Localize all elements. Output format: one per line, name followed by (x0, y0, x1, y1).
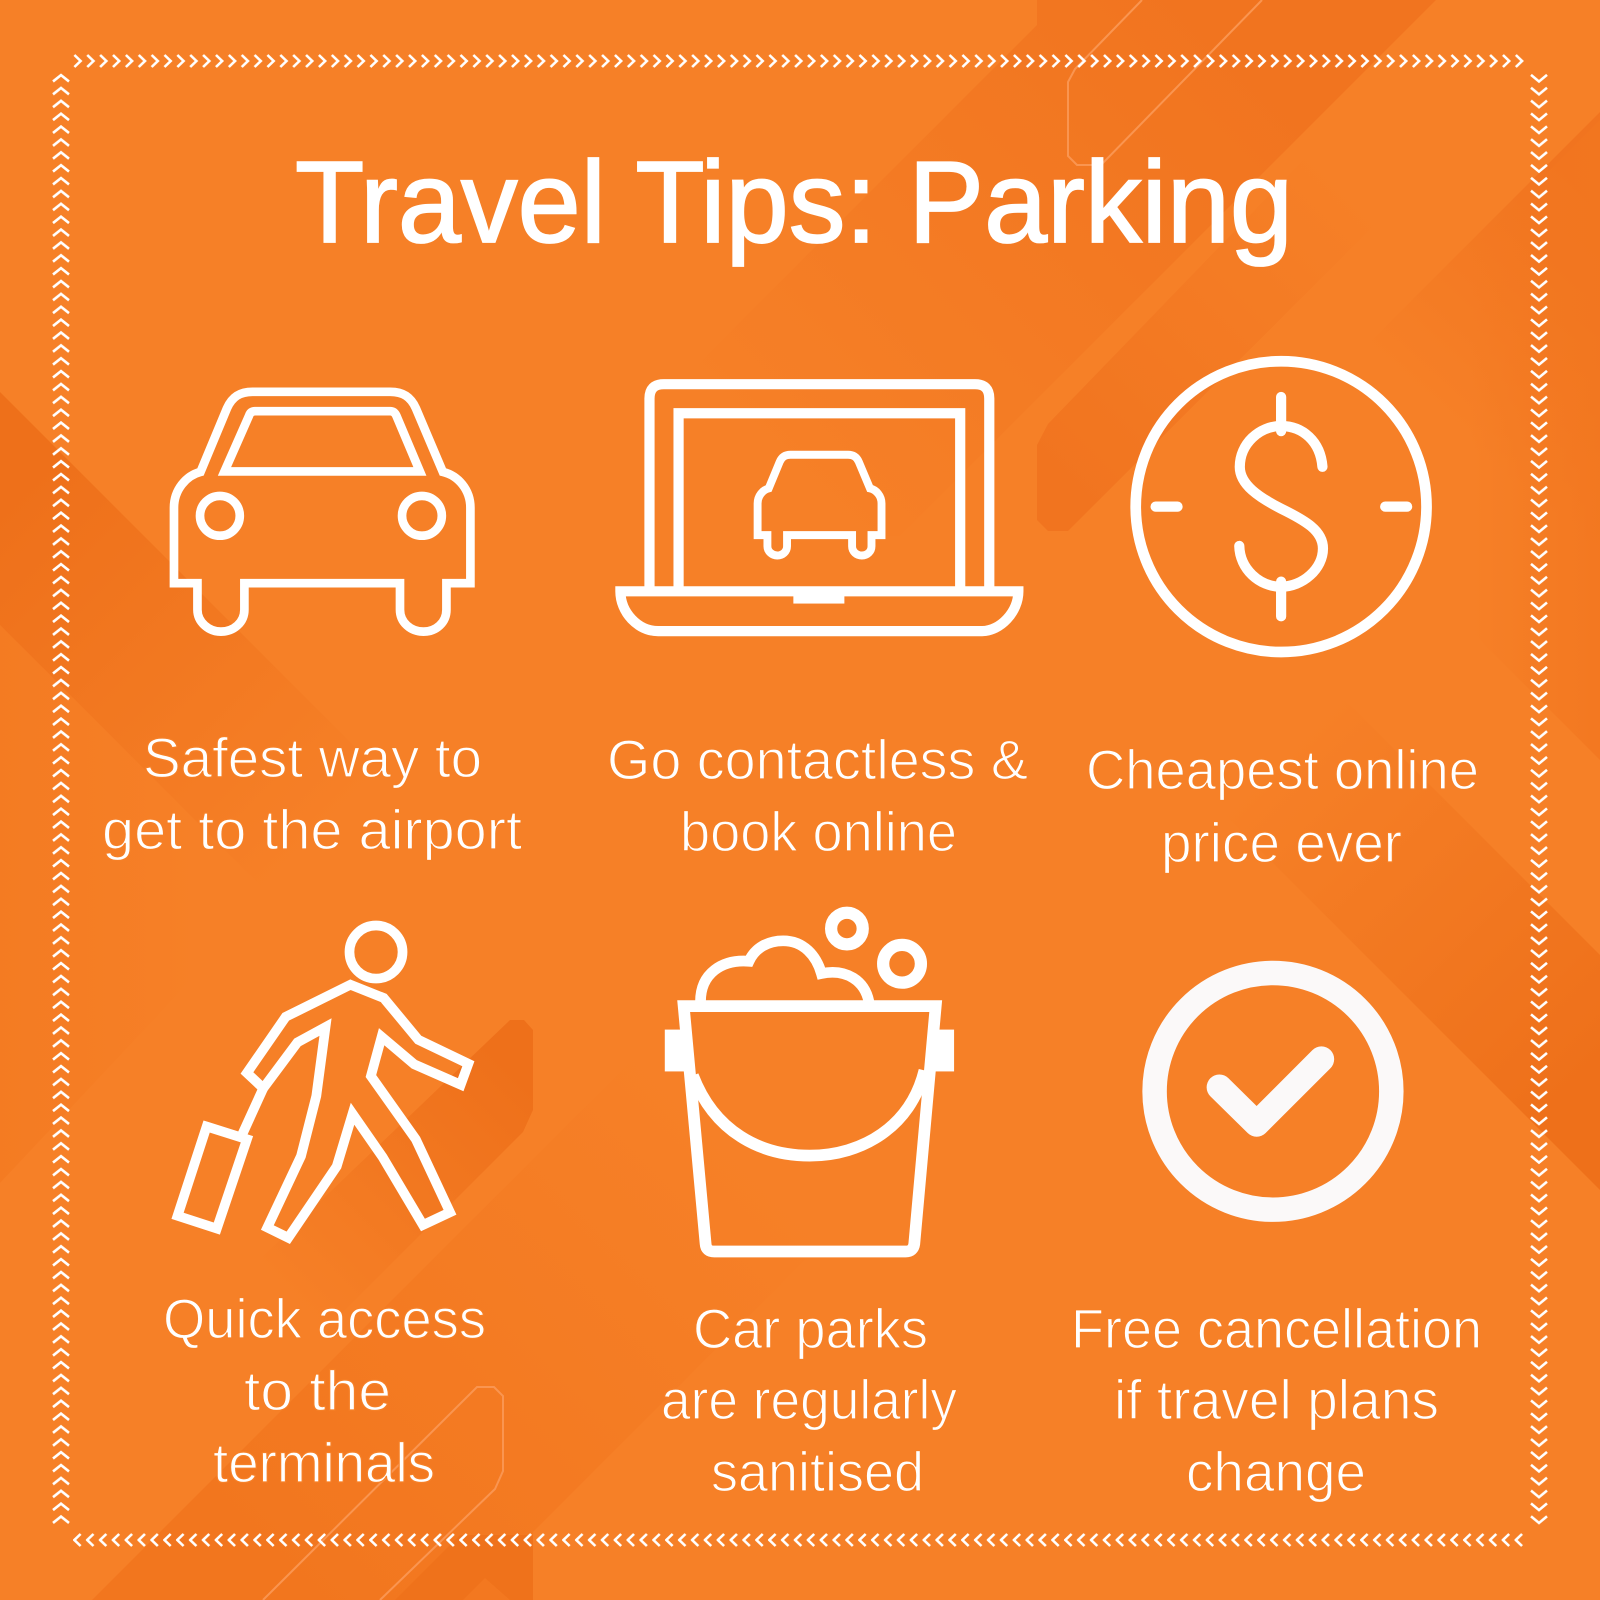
caption: quick access (163, 1287, 486, 1494)
caption: cheapest price: Cheapest online (1086, 738, 1479, 801)
icon: laptop with car (620, 384, 1018, 631)
icon: dollar clock (1136, 361, 1427, 652)
caption: free cancellation: if travel plans (1114, 1368, 1439, 1431)
caption: quick access: terminals (213, 1431, 435, 1494)
caption: cheapest price: price ever (1161, 811, 1402, 874)
caption: contactless: book online (680, 800, 957, 863)
panel: safest way (102, 392, 522, 861)
caption: quick access: to the (244, 1359, 391, 1422)
caption: safest way (102, 726, 522, 861)
panel: sanitised car parks (661, 913, 957, 1503)
panel: quick access (163, 926, 486, 1494)
caption: contactless: Go contactless & (607, 728, 1028, 791)
caption: quick access: Quick access (163, 1287, 486, 1350)
icon: bucket with foam (665, 913, 954, 1252)
caption: sanitised car parks: Car parks (693, 1297, 928, 1360)
caption: sanitised car parks: sanitised (711, 1440, 924, 1503)
caption: contactless (607, 728, 1028, 863)
caption: sanitised car parks: are regularly (661, 1368, 957, 1431)
panel: contactless (607, 384, 1028, 863)
title: Travel Tips: Parking (295, 137, 1293, 267)
panel: cheapest price (1086, 361, 1479, 874)
caption: free cancellation (1071, 1297, 1482, 1503)
caption: cheapest price (1086, 738, 1479, 874)
panel: free cancellation (1071, 973, 1482, 1503)
caption: safest way: Safest way to (143, 726, 482, 789)
caption: safest way: get to the airport (102, 798, 522, 861)
caption: free cancellation: Free cancellation (1071, 1297, 1482, 1360)
icon: walking traveller with suitcase (178, 926, 468, 1238)
caption: sanitised car parks (661, 1297, 957, 1503)
icon: car (174, 392, 470, 632)
icon: check circle (1155, 973, 1391, 1210)
caption: free cancellation: change (1186, 1440, 1366, 1503)
